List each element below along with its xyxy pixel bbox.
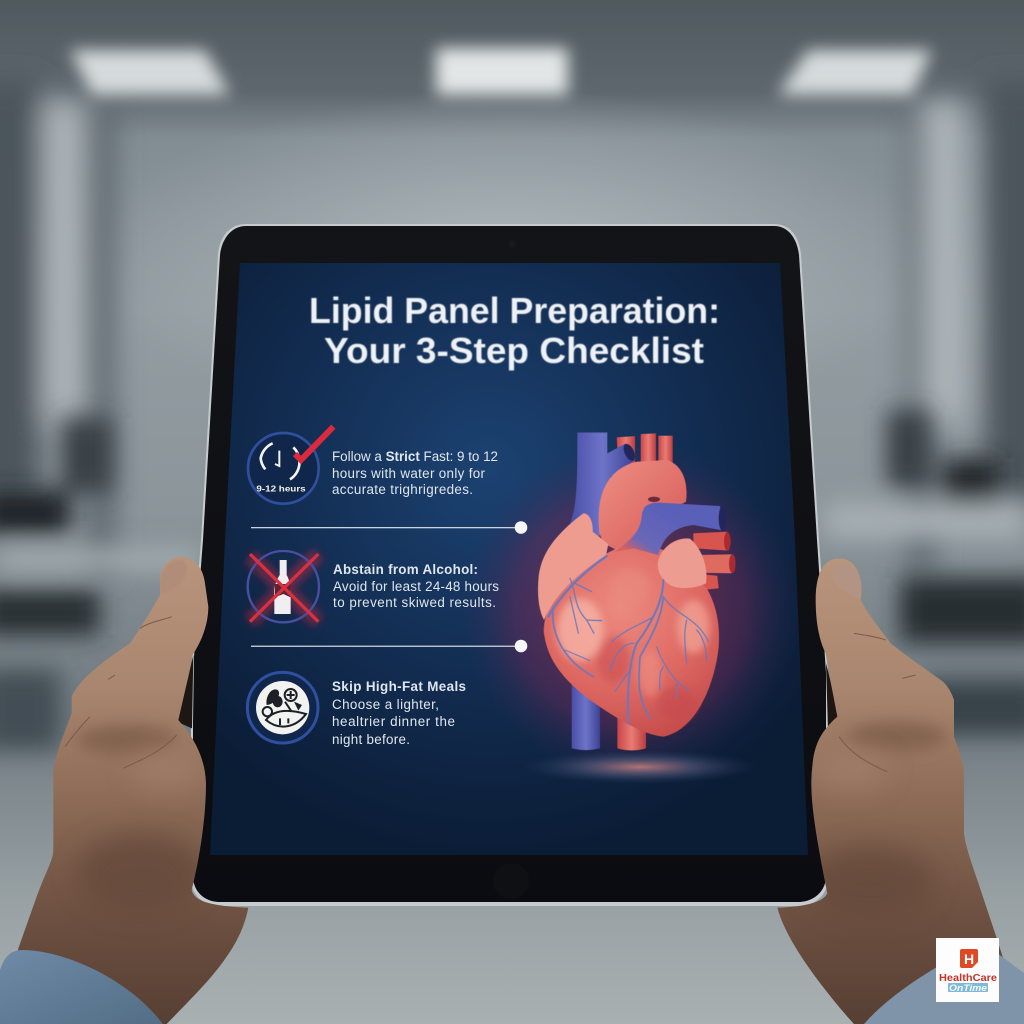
logo icon: H: [964, 951, 974, 967]
logo: HealthCare OnTime: HealthCare: [939, 972, 997, 984]
step 1 text: hours with water only for: [332, 466, 486, 481]
step 3 text: Choose a lighter,: [332, 697, 439, 712]
ventricles: [544, 540, 719, 737]
title: Your 3-Step Checklist: [324, 330, 704, 371]
step 2 text: Abstain from Alcohol:: [333, 562, 478, 577]
title: Lipid Panel Preparation:: [309, 290, 720, 331]
step 2: no alcohol icon: [248, 551, 319, 622]
right atrium: [538, 513, 608, 620]
left atrium: [658, 538, 706, 588]
step 1: fasting icon: 9-12 heurs: [256, 483, 306, 493]
title: [309, 290, 720, 371]
divider 2: [251, 640, 527, 652]
left hand: [18, 556, 248, 1024]
logo tagline: OnTime: [949, 983, 988, 994]
step 1 text: [332, 449, 498, 497]
step 1 text: accurate trighrigredes.: [332, 482, 473, 497]
step 3 text: night before.: [332, 732, 410, 747]
heart floor glow: [522, 750, 758, 784]
ventricle highlights: [557, 568, 710, 720]
coronary vessels: [548, 556, 708, 723]
step 1: fasting icon: [248, 427, 333, 504]
tablet screen: [210, 263, 808, 855]
home button: [493, 863, 529, 899]
step 1 text: Follow a Strict Fast: 9 to 12: [332, 449, 498, 464]
camera dot: [508, 240, 516, 248]
right side pipes: [693, 532, 736, 590]
tablet: [191, 224, 828, 906]
step 3: meals icon: [247, 672, 318, 743]
step 3 text: Skip High-Fat Meals: [332, 679, 466, 694]
step 3 text: healtrier dinner the: [332, 714, 455, 729]
right hand: [778, 558, 1003, 1024]
left shirt sleeve: [0, 950, 163, 1024]
heart illustration: [538, 433, 736, 750]
step 2 text: to prevent skiwed results.: [333, 595, 496, 610]
step 2 text: [333, 562, 499, 610]
pulmonary artery: [615, 503, 727, 555]
logo: HealthCare OnTime: [936, 938, 999, 1002]
step 3 text: [332, 679, 466, 747]
tablet body: [191, 224, 828, 906]
upper vessels: [570, 433, 687, 553]
step 2 text: Avoid for least 24-48 hours: [333, 579, 499, 594]
lower vessels: [572, 680, 646, 750]
right shirt sleeve: [864, 953, 1024, 1024]
divider 1: [251, 521, 527, 534]
